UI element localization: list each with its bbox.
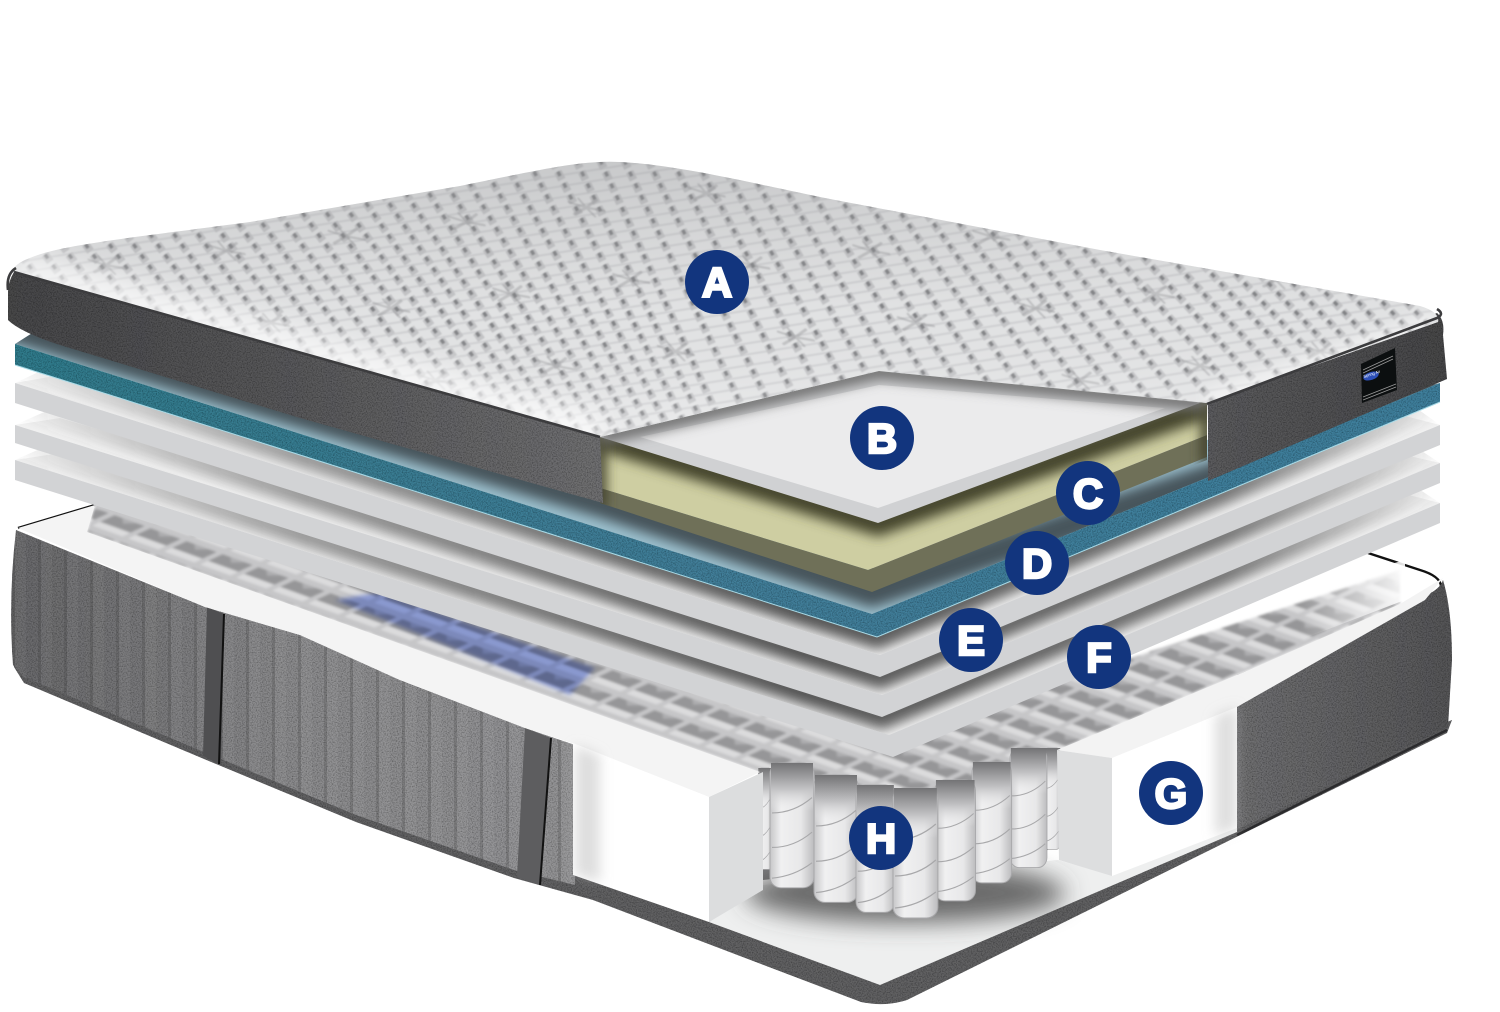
badge D: D — [1022, 540, 1052, 587]
coil tops — [87, 490, 1405, 880]
handle strip left — [203, 607, 224, 765]
badge A — [685, 250, 749, 314]
left side panel — [8, 272, 603, 503]
base back edge outlines — [18, 505, 1443, 985]
comfort foam layer 2 — [15, 403, 1440, 717]
right side panel — [1208, 313, 1447, 481]
quilted pillow top — [6, 162, 1442, 438]
right foam rail top face — [1057, 578, 1443, 758]
badge G: G — [1155, 770, 1187, 817]
badge E: E — [957, 617, 985, 664]
piping along bottom edge — [12, 650, 1452, 1004]
handle strip right — [517, 728, 551, 885]
foam layers — [15, 365, 1440, 757]
badge D — [1005, 531, 1069, 595]
badge B — [850, 406, 914, 470]
brand label — [1361, 348, 1397, 403]
badge F — [1067, 625, 1131, 689]
badge G — [1139, 761, 1203, 825]
right foam rail cut face — [1112, 707, 1237, 876]
badge B: B — [867, 415, 897, 462]
badge E — [939, 608, 1003, 672]
badge F: F — [1086, 634, 1112, 681]
left foam rail cut face — [573, 743, 709, 922]
brand label: Spring Air — [1363, 369, 1381, 379]
badge C: C — [1073, 470, 1103, 517]
comfort foam layer 1 — [15, 365, 1440, 677]
comfort foam layer 3 — [15, 443, 1440, 757]
left fabric side panel — [11, 530, 575, 885]
exposed yellow comfort foam — [600, 395, 1207, 592]
badge H — [849, 806, 913, 870]
quilt edge piping — [8, 268, 1441, 437]
badge C — [1056, 461, 1120, 525]
right fabric side panel — [1237, 580, 1452, 830]
lower mattress: pocket coil base — [11, 490, 1452, 1004]
coil shadow on floor — [745, 863, 1065, 923]
badge H: H — [866, 815, 896, 862]
exposed top foam panel — [600, 371, 1205, 523]
pocket coils — [758, 748, 1061, 918]
badge A: A — [702, 259, 732, 306]
foam floor — [573, 825, 1237, 985]
upper mattress side panels — [8, 272, 1447, 503]
teal gel foam layer — [8, 325, 1440, 637]
left foam rail top face — [18, 505, 760, 797]
